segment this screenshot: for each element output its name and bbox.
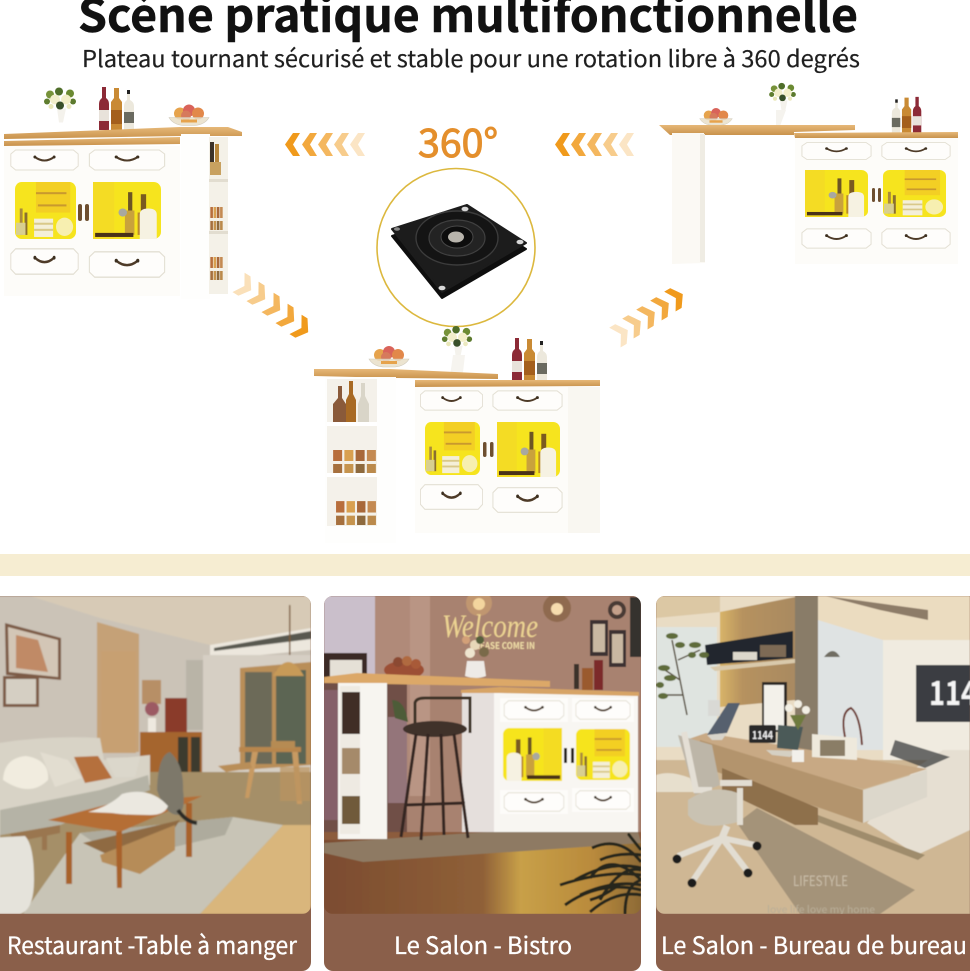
arrows: chevrons heading up-right <box>609 284 689 348</box>
product: bar cabinet half turned, centre <box>314 326 600 543</box>
photo: office desk: 1144 <box>752 727 773 743</box>
photo: bistro with bar cabinet <box>324 590 641 914</box>
arrows: left pointing chevrons, left group <box>285 133 365 156</box>
photo: office desk: LIFESTYLE <box>793 871 848 891</box>
photo: bistro with bar cabinet: PLEASE COME IN <box>470 639 535 652</box>
photo: bistro with bar cabinet: Welcome <box>442 609 538 645</box>
product: bar cabinet closed, top left <box>4 87 242 299</box>
panel: bistro lounge <box>324 590 641 971</box>
panel: home office lounge <box>656 596 970 971</box>
photo: office desk: love life love my home <box>767 901 875 916</box>
heading: 360 degrees: 360° <box>418 113 498 169</box>
arrows: left pointing chevrons, right group <box>555 133 634 156</box>
caption: restaurant: Restaurant -Table à manger <box>7 926 298 961</box>
panel: restaurant dining room <box>0 596 311 971</box>
icon: swivel plate in a circle <box>377 168 535 326</box>
product: bar cabinet open, top right <box>659 83 958 264</box>
subtitle: Plateau tournant sécurisé et stable pour une rotation libre à 360 degrés <box>82 40 860 74</box>
decorative band <box>0 554 970 576</box>
arrows: chevrons heading down-right <box>232 273 314 342</box>
caption: bistro: Le Salon - Bistro <box>394 926 572 961</box>
photo: living and dining room <box>0 596 311 914</box>
photo: office desk <box>656 596 970 916</box>
caption: office: Le Salon - Bureau de bureau <box>661 926 967 961</box>
